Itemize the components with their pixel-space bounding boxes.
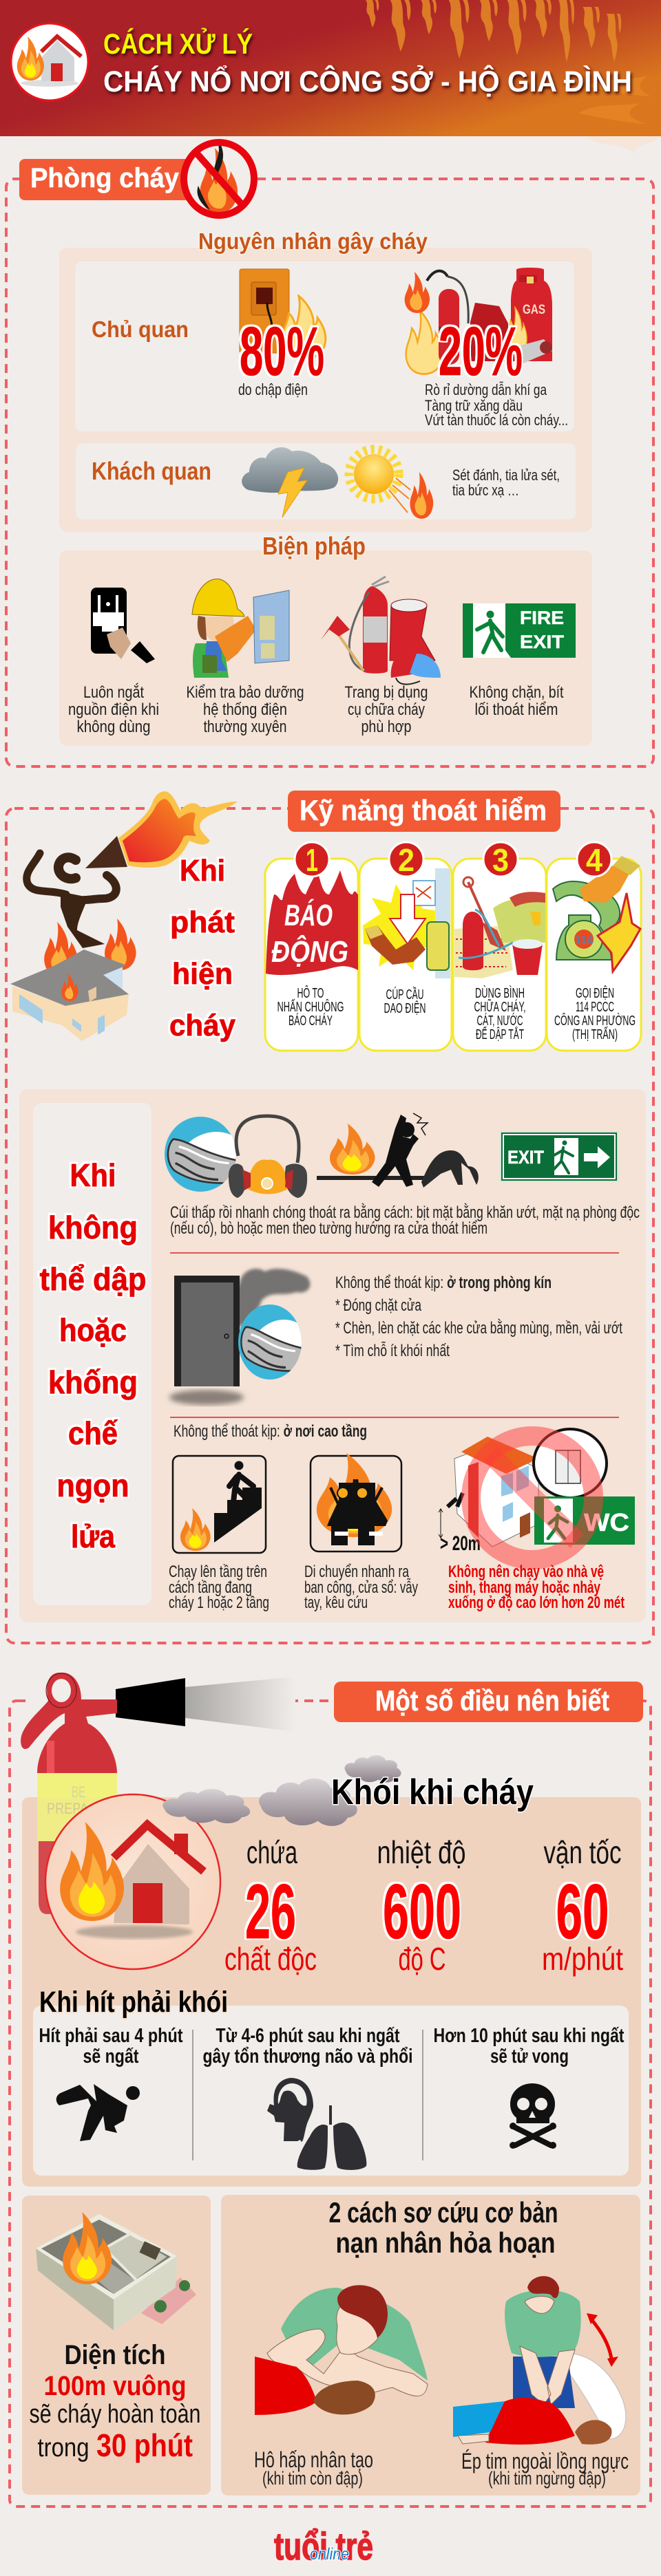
illustration: chest compression [453, 2276, 626, 2445]
icon: fire equipment [321, 577, 441, 685]
icon: stairs [173, 1456, 266, 1553]
captions: measures: thường xuyên [204, 718, 286, 736]
panel: khi hít phải khói [33, 1986, 629, 2176]
captions: measures: cụ chữa cháy [348, 700, 425, 719]
caption: subjective causes: Tàng trữ xăng dầu [425, 397, 523, 414]
icon: gas mask [229, 1116, 307, 1198]
stat: 60 metres per minute: vận tốc [544, 1834, 621, 1870]
illustration: cut the switch [363, 868, 450, 978]
illustration: alarm blaze: BÁO [284, 898, 333, 932]
column: over 10 minutes [434, 2025, 625, 2149]
captions: measures: phù hợp [361, 718, 412, 736]
icon: balcony rescue [311, 1453, 401, 1552]
caption: subjective causes: Vứt tàn thuốc lá còn cháy... [425, 411, 568, 429]
label [474, 985, 526, 1042]
icon: flammable items [405, 268, 552, 374]
side label panel: lửa [71, 1518, 115, 1554]
captions: high rise actions: ban công, cửa sổ: vẫy [304, 1578, 418, 1597]
text: Khi phát hiện cháy: phát [170, 905, 235, 939]
icon: skull and crossbones [510, 2083, 556, 2149]
warning text [448, 1563, 625, 1612]
text: area burn time: 100m vuông [44, 2371, 186, 2401]
badge 3: 3 [492, 842, 509, 878]
icon: people evacuating [372, 1113, 479, 1188]
decorative header flames [366, 0, 651, 124]
text: Khi phát hiện cháy: hiện [172, 957, 233, 991]
heading: Nguyên nhân gây cháy: Nguyên nhân gây cháy [198, 228, 428, 254]
icon: head and lungs [267, 2078, 366, 2170]
stat: 60 metres per minute: m/phút [542, 1941, 623, 1977]
icon: fire exit sign: EXIT [520, 632, 565, 652]
captions: measures: Luôn ngắt [83, 683, 144, 702]
decoration: smoke clouds [162, 1755, 401, 1826]
stat: 600 degrees: độ C [398, 1941, 446, 1977]
label: CÁT, NƯỚC [476, 1013, 523, 1029]
warning text: Không nên chạy vào nhà vệ [448, 1563, 604, 1581]
text: Khi phát hiện cháy: cháy [169, 1009, 235, 1042]
logo: tuổi trẻ online: online [310, 2545, 349, 2564]
stat: 600 degrees [377, 1834, 465, 1977]
captions: measures: không dùng [77, 718, 150, 736]
captions: first aid: (khi tim ngừng đập) [488, 2468, 606, 2489]
heading: 2 cách sơ cứu [329, 2196, 558, 2259]
stat: 60 metres per minute [542, 1834, 623, 1977]
icon: do not use toilet elevator or jump [439, 1429, 635, 1560]
column: 4 to 6 minutes: Từ 4-6 phút sau khi ngất [216, 2025, 400, 2047]
icon: no fire sign [184, 141, 254, 215]
icon: burning socket [240, 269, 326, 359]
text: closed room guidance: * Đóng chặt cửa [335, 1296, 421, 1315]
illustration: phone call: 114 [574, 934, 594, 947]
badge 2: 2 [398, 842, 415, 878]
side label panel: chế [68, 1415, 118, 1451]
text: area burn time: trong [37, 2434, 90, 2462]
text: crouch instructions: (nếu có), bò hoặc men theo tường hướng ra cửa thoát hiểm [170, 1219, 487, 1238]
side label panel: Khi [70, 1157, 116, 1193]
icon: house on fire in circle [45, 1794, 220, 1969]
title: CÁCH XỬ LÝ [103, 27, 253, 60]
panel: chủ quan [75, 261, 574, 431]
header banner [0, 0, 661, 136]
caption: objective causes: Sét đánh, tia lửa sét, [452, 466, 560, 484]
section: Một số điều nên biết [10, 1673, 651, 2507]
heading pill: Kỹ năng thoát hiểm: Kỹ năng thoát hiểm [300, 794, 547, 826]
column: after 4 minutes: sẽ ngất [83, 2046, 139, 2068]
captions: high rise actions [169, 1563, 418, 1612]
badge 4: 4 [586, 842, 602, 878]
step card 2: cúp cầu dao [359, 842, 452, 1051]
label: HÔ TO [297, 985, 324, 1001]
illustration: alarm blaze: ĐỘNG [271, 934, 348, 969]
text: Khi phát hiện cháy: Khi [180, 854, 225, 888]
illustration: extinguisher, sand, water [454, 877, 545, 978]
icon: exit sign [501, 1132, 618, 1181]
stat: 26 toxins: chứa [246, 1834, 297, 1870]
captions: high rise actions: tay, kêu cứu [304, 1593, 368, 1612]
captions: measures: Kiểm tra bảo dưỡng [186, 683, 304, 702]
panel: nguyên nhân [59, 228, 592, 532]
column: 4 to 6 minutes [202, 2025, 413, 2170]
icon: wet towel [165, 1117, 236, 1192]
text: high rise heading: Không thể thoát kịp: ở nơi cao tầng [174, 1422, 367, 1441]
caption: subjective causes [425, 381, 568, 429]
stat: 60 metres per minute: 60 [556, 1869, 609, 1955]
text: Khi phát hiện cháy [169, 854, 235, 1042]
illustration: alarm blaze [266, 870, 358, 975]
caption: do chập điện: do chập điện [238, 380, 308, 398]
text: area burn time: Diện tích [65, 2340, 165, 2370]
heading pill: Phòng cháy [19, 159, 191, 200]
label [277, 985, 344, 1029]
stat: 600 degrees: nhiệt độ [377, 1834, 465, 1870]
text: crouch instructions [170, 1203, 640, 1238]
icon: door with smoke and towel [169, 1269, 310, 1405]
step card 3: dùng bình chữa cháy [453, 842, 546, 1051]
icon: flammable items: GAS [523, 303, 545, 317]
side label panel: hoặc [59, 1312, 127, 1348]
captions: high rise actions: cách tầng đang [169, 1578, 252, 1597]
badge 1 [295, 842, 329, 878]
stat: 600 degrees: 600 [383, 1869, 461, 1955]
label: ĐỂ DẬP TẮT [476, 1026, 524, 1042]
panel: sơ cứu [221, 2195, 640, 2496]
captions: measures: Không chặn, bít [470, 683, 564, 702]
illustration: phone call [553, 856, 640, 972]
label [384, 987, 426, 1016]
text: closed room guidance: * Tìm chỗ ít khói nhất [335, 1342, 450, 1360]
text: closed room guidance: Không thể thoát kịp: ở trong phòng kín [335, 1274, 552, 1292]
captions: first aid: (khi tim còn đập) [262, 2468, 363, 2489]
caption: objective causes [452, 466, 560, 499]
side label panel [33, 1103, 151, 1605]
illustration: extinguisher lower [37, 1797, 117, 1914]
heading: 2 cách sơ cứu: nạn nhân hỏa hoạn [336, 2226, 555, 2259]
icon: fire exit sign [463, 603, 576, 658]
section: Phòng cháy [6, 141, 653, 766]
logo: tuổi trẻ online: tuổi trẻ [274, 2524, 373, 2568]
panel: khi không thể dập [19, 1089, 646, 1622]
logo: burning house in circle [11, 23, 88, 100]
icon: do not use toilet elevator or jump: WC [584, 1508, 629, 1536]
heading: Khói khi cháy: Khói khi cháy [331, 1772, 534, 1812]
captions: high rise actions: cháy 1 hoặc 2 tầng [169, 1593, 269, 1612]
captions: measures: Trang bị dụng [344, 683, 428, 702]
column: after 4 minutes: Hít phải sau 4 phút [39, 2025, 183, 2047]
captions: measures [68, 683, 564, 736]
captions: measures: nguồn điện khi [68, 700, 159, 719]
badge 4 [577, 842, 611, 878]
heading: Biện pháp: Biện pháp [262, 532, 366, 560]
section: Kỹ năng thoát hiểm [6, 791, 653, 1643]
label: NHẤN CHUÔNG [277, 999, 344, 1015]
icon: do not use toilet elevator or jump: > 20m [440, 1532, 481, 1555]
icon: exit sign: EXIT [507, 1147, 544, 1168]
illustration: person with megaphone on burning house [10, 791, 238, 1041]
icon: flames on floor [317, 1124, 430, 1180]
text: area burn time: sẽ cháy hoàn toàn [29, 2400, 201, 2429]
panel: khách quan [76, 443, 576, 519]
stat: 26 toxins [224, 1834, 317, 1977]
heading pill: Một số điều nên biết: Một số điều nên biết [375, 1684, 609, 1717]
caption: objective causes: tia bức xạ … [452, 482, 519, 499]
heading: 2 cách sơ cứu: 2 cách sơ cứu cơ bản [329, 2196, 558, 2229]
captions: high rise actions: Chạy lên tầng trên [169, 1563, 267, 1581]
badge 1: 1 [306, 842, 318, 878]
label: DÙNG BÌNH [475, 985, 525, 1001]
label: DAO ĐIỆN [384, 1000, 426, 1016]
side label panel: không [48, 1210, 138, 1245]
stat: 26 toxins: 26 [245, 1869, 296, 1955]
captions: first aid [254, 2447, 629, 2489]
icon: unplugging [91, 588, 155, 663]
label: BÁO CHÁY [288, 1013, 333, 1029]
column: after 4 minutes [39, 2025, 183, 2141]
faint flames below header [585, 136, 661, 155]
panel: khói khi cháy [22, 1755, 641, 2187]
icon: electrician [192, 579, 289, 678]
side label panel: ngọn [56, 1468, 129, 1503]
badge 3 [483, 842, 518, 878]
title [103, 27, 632, 98]
heading: Khi hít phải khói: Khi hít phải khói [39, 1986, 228, 2019]
illustration: extinguisher upper: BE [72, 1783, 85, 1801]
label: Chủ quan: Chủ quan [92, 316, 189, 342]
captions: high rise actions: Di chuyển nhanh ra [304, 1563, 409, 1581]
icon: storm cloud with lightning [242, 447, 338, 517]
panel: diện tích [22, 2196, 211, 2495]
column: 4 to 6 minutes: gây tổn thương não và phổi [202, 2046, 413, 2068]
icon: fire exit sign: FIRE [520, 608, 564, 628]
badge 2 [389, 842, 423, 878]
label: CHỮA CHÁY, [474, 998, 526, 1015]
title: CHÁY NỔ NƠI CÔNG SỞ - HỘ GIA ĐÌNH [103, 64, 632, 98]
illustration: burning apartment [36, 2212, 196, 2330]
illustration: extinguisher upper [21, 1673, 295, 1844]
label: GỌI ĐIỆN [576, 985, 614, 1001]
stat: 80%: 80% [240, 313, 324, 390]
label [554, 985, 636, 1042]
heading pill: Phòng cháy: Phòng cháy [30, 163, 180, 193]
text: closed room guidance [335, 1274, 622, 1360]
text: area burn time [29, 2340, 201, 2463]
captions: measures: lối thoát hiểm [475, 700, 558, 719]
panel: biện pháp [59, 532, 592, 746]
label: (THỊ TRẤN) [572, 1027, 618, 1042]
warning text: sinh, thang máy hoặc nhảy [448, 1578, 600, 1597]
label: Khách quan: Khách quan [92, 457, 211, 485]
label: CÚP CẦU [386, 987, 424, 1002]
illustration: extinguisher lower: PREPA [47, 1800, 88, 1817]
icon: sun [349, 449, 433, 519]
stat: 26 toxins: chất độc [224, 1941, 317, 1977]
step card 4: gọi điện 114 [547, 842, 641, 1051]
caption: subjective causes: Rò rỉ dường dẫn khí ga [425, 381, 547, 398]
captions: first aid: Hô hấp nhân tạo [254, 2447, 373, 2472]
label: 114 PCCC [576, 1000, 614, 1015]
side label panel: khống [48, 1364, 138, 1400]
stat: 20%: 20% [439, 313, 523, 390]
column: over 10 minutes: sẽ tử vong [490, 2046, 569, 2068]
heading pill: Một số điều nên biết [334, 1682, 643, 1722]
icon: fainting person [56, 2084, 140, 2141]
side label panel: thể dập [40, 1261, 146, 1297]
step card 1: báo động [265, 842, 358, 1051]
text: area burn time: 30 phút [96, 2427, 193, 2463]
illustration: mouth to mouth [255, 2285, 428, 2415]
captions: measures: hệ thống điện [203, 700, 287, 719]
